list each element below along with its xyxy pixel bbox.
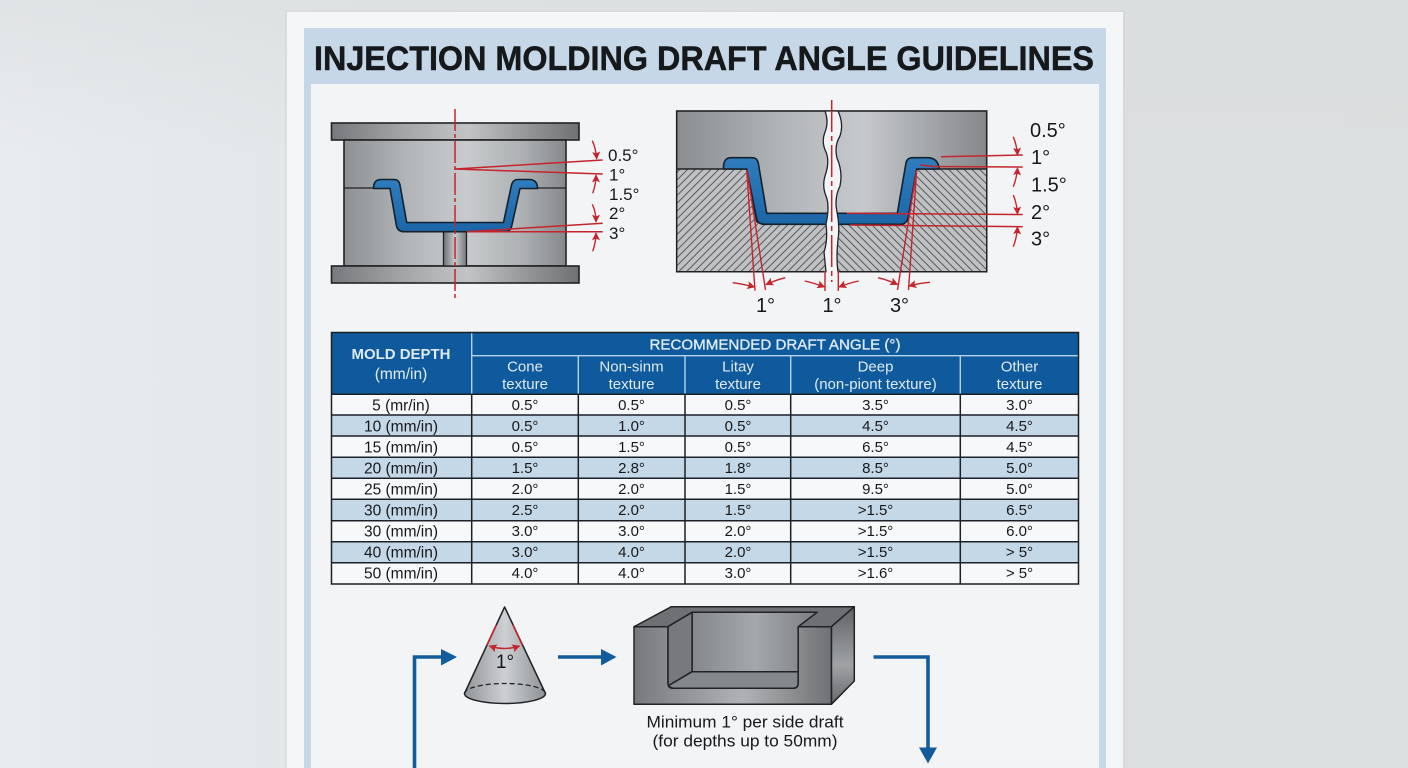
row 25: 2.0° bbox=[512, 481, 538, 498]
row 15: 15 (mm/in) bbox=[364, 440, 438, 456]
row 30: 1.5° bbox=[725, 502, 751, 519]
side angle labels: 1° bbox=[1031, 147, 1050, 169]
bottom angle labels bbox=[756, 295, 909, 317]
side angle labels: 1.5° bbox=[1031, 174, 1067, 196]
table header: texture bbox=[997, 376, 1042, 393]
sprue bbox=[444, 231, 466, 266]
table header: Cone bbox=[507, 358, 543, 376]
top plate bbox=[332, 123, 579, 140]
row 25: 25 (mm/in) bbox=[364, 482, 438, 498]
row 5: 3.5° bbox=[862, 397, 889, 414]
row 30: 2.5° bbox=[512, 502, 538, 519]
row 10: 4.5° bbox=[1006, 418, 1033, 435]
row 5: 0.5° bbox=[512, 397, 538, 414]
hatched lower block left bbox=[677, 169, 832, 272]
row 25: 1.5° bbox=[725, 481, 751, 498]
table header: RECOMMENDED DRAFT ANGLE (°) bbox=[650, 338, 900, 354]
row 5: 0.5° bbox=[618, 397, 645, 414]
bottom plate bbox=[332, 266, 579, 283]
arrow: cone to block bbox=[558, 649, 616, 666]
row 30 repeat: 30 (mm/in) bbox=[364, 524, 438, 540]
row 10: 1.0° bbox=[618, 418, 645, 435]
angle labels: 1.5° bbox=[609, 185, 639, 204]
row 20: 20 (mm/in) bbox=[364, 460, 438, 478]
row 15: 4.5° bbox=[1006, 439, 1033, 456]
row 30: >1.5° bbox=[858, 502, 893, 519]
row 40: 2.0° bbox=[725, 544, 751, 561]
angle lines bbox=[847, 155, 1023, 227]
bottom angle labels: 1° bbox=[756, 295, 775, 317]
mold body bbox=[344, 140, 566, 266]
bottom angle labels: 1° bbox=[822, 295, 842, 317]
row 50: 4.0° bbox=[512, 565, 538, 582]
row 10: 0.5° bbox=[725, 418, 751, 435]
title band frame bbox=[304, 28, 1106, 768]
molded part bbox=[374, 180, 538, 232]
row 40: 40 (mm/in) bbox=[364, 544, 438, 562]
row 5: 5 (mr/in) bbox=[372, 398, 430, 414]
row 30 repeat: 6.0° bbox=[1006, 523, 1033, 540]
table header bbox=[332, 332, 1078, 394]
icon: cone with 1 degree angle: 1° bbox=[496, 652, 514, 673]
row 10: 10 (mm/in) bbox=[364, 418, 438, 436]
row 30 bbox=[364, 502, 1033, 520]
table header: Other bbox=[1001, 358, 1038, 376]
hatched lower block right bbox=[832, 169, 987, 272]
row backgrounds bbox=[332, 394, 1078, 584]
row 25 bbox=[364, 481, 1033, 498]
row 30: 30 (mm/in) bbox=[364, 502, 438, 520]
table header: Deep bbox=[858, 358, 893, 376]
diagram: right mold detail section bbox=[677, 100, 1067, 317]
row 30 repeat: 3.0° bbox=[618, 523, 645, 540]
row 20: 2.8° bbox=[618, 460, 645, 477]
row 10 bbox=[364, 418, 1033, 436]
angle labels: 3° bbox=[609, 224, 625, 243]
row 50: > 5° bbox=[1006, 565, 1033, 582]
row 20: 1.5° bbox=[512, 460, 538, 477]
angle labels: 0.5° bbox=[608, 146, 638, 165]
table grid bbox=[332, 332, 1078, 584]
table header: (mm/in) bbox=[375, 366, 427, 383]
row 30 repeat: 3.0° bbox=[512, 523, 538, 540]
diagram: left mold cross-section bbox=[332, 109, 639, 298]
row 15 bbox=[364, 439, 1033, 456]
row 25: 9.5° bbox=[862, 481, 889, 498]
block caption bbox=[646, 714, 844, 750]
row 15: 0.5° bbox=[725, 439, 751, 456]
block caption: Minimum 1° per side draft bbox=[646, 714, 844, 732]
table header: (non-piont texture) bbox=[814, 376, 937, 393]
row 20: 5.0° bbox=[1006, 460, 1033, 477]
angle labels bbox=[608, 146, 639, 243]
table: recommended draft angle bbox=[332, 332, 1078, 584]
angle labels: 1° bbox=[609, 166, 625, 184]
draft lines bbox=[747, 170, 917, 291]
row 40: 3.0° bbox=[512, 544, 538, 561]
row 40: 4.0° bbox=[618, 544, 645, 561]
row 15: 1.5° bbox=[618, 439, 645, 456]
angle arrows bbox=[733, 137, 1018, 287]
row 30 repeat bbox=[364, 523, 1033, 540]
row 50: 4.0° bbox=[618, 565, 645, 582]
bottom angle labels: 3° bbox=[890, 295, 909, 317]
row 40 bbox=[364, 544, 1033, 562]
row 50: >1.6° bbox=[858, 565, 893, 582]
table header: texture bbox=[715, 376, 761, 393]
row 15: 0.5° bbox=[512, 439, 538, 456]
center line bbox=[831, 100, 833, 282]
arrow: up and into cone bbox=[414, 649, 457, 768]
row 20: 8.5° bbox=[862, 460, 889, 477]
row 10: 4.5° bbox=[862, 418, 889, 435]
row 50: 3.0° bbox=[725, 565, 751, 582]
row 25: 5.0° bbox=[1006, 481, 1033, 498]
row 30 repeat: 2.0° bbox=[725, 523, 751, 540]
center line bbox=[454, 109, 456, 298]
table rows bbox=[364, 397, 1033, 582]
poster paper bbox=[285, 10, 1125, 768]
side angle labels: 0.5° bbox=[1030, 120, 1066, 142]
block caption: (for depths up to 50mm) bbox=[652, 732, 838, 750]
upper mold block bbox=[677, 111, 987, 272]
table header: Litay bbox=[722, 358, 754, 376]
row 30 repeat: >1.5° bbox=[858, 523, 893, 540]
row 40: > 5° bbox=[1006, 544, 1033, 561]
table header: texture bbox=[502, 376, 548, 393]
row 10: 0.5° bbox=[512, 418, 538, 435]
row 30: 2.0° bbox=[618, 502, 645, 519]
molded part bbox=[723, 158, 939, 224]
table header: MOLD DEPTH bbox=[352, 347, 450, 363]
row 20: 1.8° bbox=[725, 460, 751, 477]
row 30: 6.5° bbox=[1006, 502, 1033, 519]
angle arrows bbox=[592, 141, 597, 251]
side angle labels bbox=[1030, 120, 1067, 250]
row 25: 2.0° bbox=[618, 481, 645, 498]
row 40: >1.5° bbox=[858, 544, 893, 561]
row 5: 3.0° bbox=[1006, 397, 1033, 414]
title: INJECTION MOLDING DRAFT ANGLE GUIDELINES bbox=[314, 40, 1094, 78]
icon: mold cavity block bbox=[634, 607, 854, 704]
arrow: block down bbox=[874, 657, 937, 764]
angle lines bbox=[455, 160, 603, 232]
table header: Non-sinm bbox=[599, 358, 664, 376]
row 50: 50 (mm/in) bbox=[364, 566, 438, 582]
angle labels: 2° bbox=[609, 204, 625, 223]
wavy section break bbox=[823, 111, 842, 275]
row 20 bbox=[364, 460, 1033, 478]
side angle labels: 2° bbox=[1031, 202, 1050, 224]
icon: cone with 1 degree angle bbox=[464, 607, 546, 704]
row 5 bbox=[372, 397, 1033, 414]
row 5: 0.5° bbox=[725, 397, 751, 414]
row 15: 6.5° bbox=[862, 439, 889, 456]
side angle labels: 3° bbox=[1031, 228, 1050, 250]
parting line bbox=[344, 187, 566, 189]
row 50 bbox=[364, 565, 1033, 582]
table header: texture bbox=[609, 376, 654, 393]
